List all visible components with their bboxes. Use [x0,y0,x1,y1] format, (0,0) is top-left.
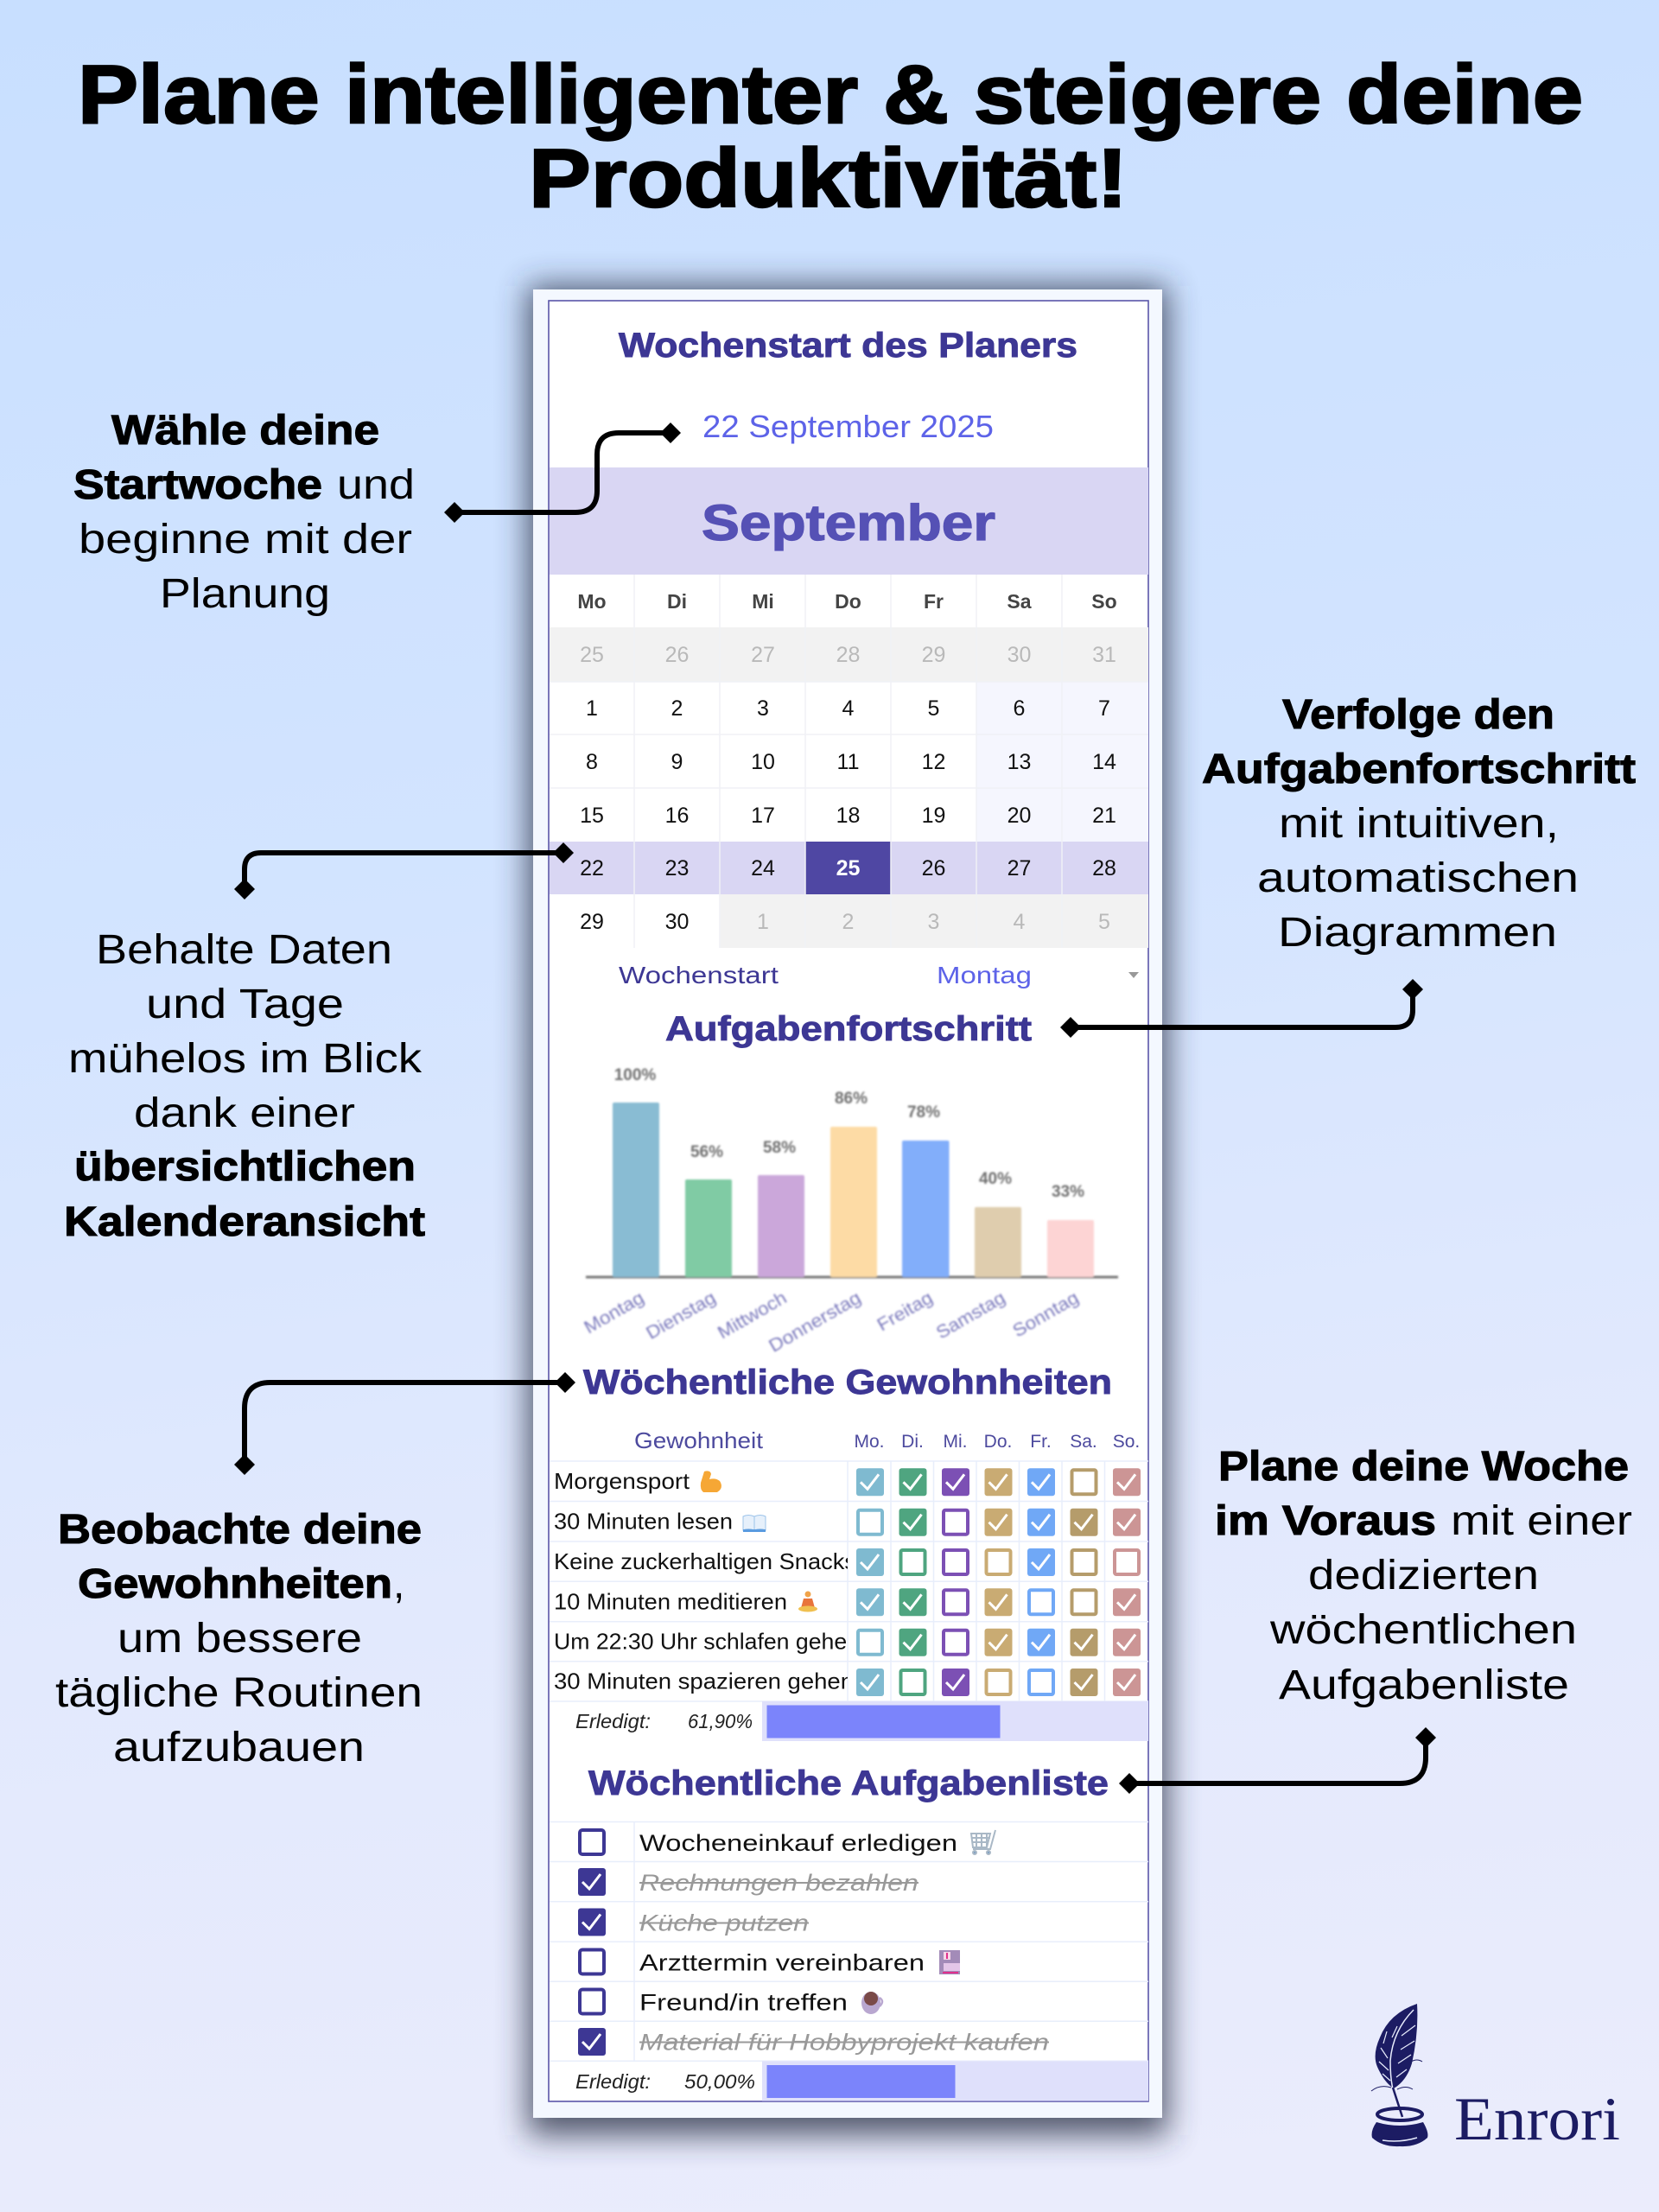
callout: Gewohnheiten: aufzubauen [113,1725,365,1770]
callout: Gewohnheiten [55,1507,423,1770]
calendar: 5 [1098,910,1110,934]
habit row: 30 Minuten lesen: 30 Minuten lesen [554,1509,733,1535]
title: Produktivität! [529,132,1128,225]
calendar [550,575,1148,948]
calendar: 13 [1007,750,1031,774]
calendar: 1 [757,910,769,934]
calendar: Do [835,590,861,613]
bar chart: 58% [763,1139,796,1157]
calendar: 18 [836,804,860,828]
calendar: 25 [836,856,860,880]
calendar: 11 [837,750,859,774]
callout: Aufgabenliste [1215,1444,1632,1708]
icon: feather and ink pot [1371,2004,1427,2146]
dropdown: Wochenstart: Montag [937,962,1032,988]
callout: Kalenderansicht: übersichtlichen [74,1144,416,1190]
habit table header: Fr. [1030,1432,1052,1452]
heading: Aufgabenfortschritt: Aufgabenfortschritt [665,1010,1032,1048]
calendar: 26 [922,856,945,880]
calendar: 14 [1092,750,1116,774]
bar chart: Montag [581,1287,648,1338]
habit table header: Mo. [854,1432,885,1452]
bar chart: 100% [614,1066,656,1084]
arrow: Aufgabenfortschritt [1060,979,1423,1038]
callout: Startwoche: Wähle deine [111,408,379,454]
habit row: Morgensport: Morgensport [554,1468,690,1494]
bar chart: Donnerstag [766,1287,864,1357]
habit row: Keine zuckerhaltigen Snacks: Keine zuckerhaltigen Snacks [554,1548,856,1574]
callout: Kalenderansicht [64,927,425,1245]
calendar: 10 [751,750,775,774]
calendar: 4 [1014,910,1026,934]
habit row: 10 Minuten meditieren: 10 Minuten meditieren [554,1588,787,1614]
task: Material für Hobbyprojekt kaufen: Material für Hobbyprojekt kaufen [639,2029,1049,2055]
bar chart: 86% [835,1090,868,1108]
callout: Gewohnheiten: tägliche Routinen [55,1670,423,1716]
bar chart: 40% [979,1170,1012,1188]
calendar: 28 [1092,856,1116,880]
calendar: 28 [836,643,860,667]
callout: Aufgabenliste: Aufgabenliste [1279,1662,1569,1708]
habit row: 30 Minuten spazieren gehen [554,1669,1141,1696]
habit table header: Di. [901,1432,924,1452]
calendar: 2 [842,910,854,934]
heading: Wöchentliche Aufgabenliste: Wöchentliche Aufgabenliste [588,1764,1109,1802]
calendar: 8 [586,750,598,774]
arrow: Startwoche to date [444,423,681,523]
arrow: Gewohnheiten to heading [234,1372,575,1475]
calendar: Mi [752,590,774,613]
habit row: Um 22:30 Uhr schlafen gehen [554,1628,1141,1656]
callout: Aufgabenfortschritt: automatischen [1257,855,1579,901]
callout: Aufgabenliste: Plane deine Woche [1218,1444,1629,1490]
callout: Gewohnheiten: Gewohnheiten [78,1561,392,1607]
bar chart [581,1066,1118,1357]
task: Wocheneinkauf erledigen [580,1830,995,1856]
start date: 22 September 2025 [702,409,994,444]
task: Freund/in treffen: Freund/in treffen [639,1989,848,2015]
arrow: Kalender to week row [234,842,574,899]
calendar: 4 [842,696,855,721]
calendar: 16 [665,804,689,828]
calendar: 5 [928,696,939,721]
logo: Enrori: Enrori [1454,2086,1620,2153]
calendar: Sa [1007,590,1032,613]
callout: Aufgabenliste: dedizierten [1308,1553,1539,1599]
calendar: 3 [928,910,939,934]
habit progress bar: 61,90% [688,1710,753,1732]
calendar: 30 [1007,643,1031,667]
bar chart: Dienstag [643,1287,719,1344]
habit table header [634,1427,1140,1453]
callout: Kalenderansicht: mühelos im Blick [68,1036,423,1082]
calendar: 12 [922,750,945,774]
calendar: Mo [577,590,607,613]
callout: Startwoche: Startwoche [73,462,322,508]
habit row: 10 Minuten meditieren [554,1588,1141,1616]
calendar: 27 [1007,856,1031,880]
calendar: 23 [665,856,689,880]
calendar: 3 [757,696,769,721]
callout: Startwoche: beginne mit der [79,517,412,563]
bar chart: Samstag [933,1287,1009,1343]
calendar: Fr [924,590,944,613]
habit row: Morgensport [554,1468,1141,1496]
calendar: 31 [1092,643,1116,667]
icon: book [743,1516,766,1532]
calendar: 19 [922,804,945,828]
task progress bar [575,2062,1148,2101]
task: Freund/in treffen [580,1989,882,2015]
calendar: 30 [665,910,689,934]
habit progress bar: Erledigt: [575,1710,651,1732]
callout: Aufgabenliste: wöchentlichen [1269,1607,1577,1653]
callout: Aufgabenfortschritt: mit intuitiven, [1279,801,1559,847]
callout: Startwoche: Planung [160,571,330,617]
callout: Aufgabenliste: mit einer [1451,1498,1632,1544]
habit progress bar [575,1701,1148,1741]
callout: Gewohnheiten: , [393,1561,404,1607]
calendar: 26 [665,643,689,667]
task: Rechnungen bezahlen [578,1868,918,1896]
month banner: September [702,495,995,551]
calendar: 24 [751,856,775,880]
panel shadow [528,286,1167,2135]
title [78,48,1583,225]
habit row: 30 Minuten lesen [554,1509,1141,1536]
callout: Kalenderansicht: und Tage [146,982,344,1027]
panel: planner [533,289,1162,2118]
calendar: 17 [751,804,775,828]
habit table header: Sa. [1070,1432,1097,1452]
callout: Kalenderansicht: Kalenderansicht [64,1199,425,1245]
calendar: 22 [580,856,604,880]
heading: Wochenstart des Planers: Wochenstart des Planers [619,327,1077,365]
habit row: Um 22:30 Uhr schlafen gehen: Um 22:30 Uhr schlafen gehen [554,1628,860,1654]
callout: Kalenderansicht: dank einer [134,1090,355,1136]
title: Plane intelligenter & steigere deine [78,48,1583,141]
habit table header: So. [1113,1432,1140,1452]
icon: flexed biceps [701,1471,721,1492]
calendar: 21 [1092,804,1116,828]
bar chart: Freitag [874,1287,937,1335]
bar chart: 56% [690,1143,723,1161]
callout: Gewohnheiten: um bessere [118,1616,362,1662]
icon: hospital [939,1950,960,1974]
calendar: 29 [580,910,604,934]
habit row: Keine zuckerhaltigen Snacks [554,1548,1139,1576]
calendar: 1 [586,696,598,721]
callout: Kalenderansicht: Behalte Daten [96,927,392,973]
calendar: 6 [1014,696,1025,721]
bar chart: 33% [1052,1183,1084,1201]
dropdown: Wochenstart: Wochenstart [619,962,779,988]
task progress bar: 50,00% [684,2070,755,2093]
habit row: 30 Minuten spazieren gehen: 30 Minuten spazieren gehen [554,1669,854,1694]
calendar: 27 [751,643,775,667]
task: Wocheneinkauf erledigen: Wocheneinkauf erledigen [639,1830,957,1856]
callout: Aufgabenliste: im Voraus [1215,1498,1436,1544]
bar chart: Mittwoch [715,1287,790,1343]
callout: Startwoche: und [337,462,415,508]
task: Rechnungen bezahlen: Rechnungen bezahlen [639,1870,918,1896]
calendar: 15 [580,804,604,828]
habit table header: Gewohnheit [634,1427,764,1453]
task: Arzttermin vereinbaren: Arzttermin vereinbaren [639,1949,925,1975]
calendar: 20 [1007,804,1031,828]
task: Küche putzen: Küche putzen [639,1910,809,1936]
callout: Aufgabenfortschritt: Aufgabenfortschritt [1202,747,1636,792]
bar chart: Sonntag [1009,1287,1082,1341]
arrow: Aufgabenliste [1119,1727,1436,1794]
bar chart: 78% [907,1103,940,1122]
calendar: 25 [580,643,604,667]
callout: Aufgabenfortschritt: Diagrammen [1278,910,1557,956]
calendar: So [1091,590,1117,613]
calendar: 2 [671,696,683,721]
heading: Wöchentliche Gewohnheiten: Wöchentliche Gewohnheiten [583,1363,1112,1402]
callout: Startwoche [73,408,415,617]
task progress bar: Erledigt: [575,2070,651,2093]
calendar: Di [667,590,687,613]
habit table header: Mi. [944,1432,968,1452]
task: Material für Hobbyprojekt kaufen [578,2028,1049,2056]
habit table header: Do. [984,1432,1012,1452]
task: Küche putzen [578,1908,809,1936]
task: Arzttermin vereinbaren [580,1949,960,1975]
callout: Gewohnheiten: Beobachte deine [58,1507,422,1553]
dropdown: Wochenstart [619,962,1139,988]
icon: shopping cart [971,1830,995,1854]
month banner [550,467,1148,575]
icon: person meditating [798,1592,817,1612]
icon: coffee cup [861,1992,882,2014]
logo: Enrori [1371,2004,1620,2153]
calendar: 9 [671,750,683,774]
calendar: 29 [922,643,945,667]
callout: Aufgabenfortschritt: Verfolge den [1282,692,1554,738]
calendar: 7 [1098,696,1110,721]
callout: Aufgabenfortschritt [1202,692,1636,956]
